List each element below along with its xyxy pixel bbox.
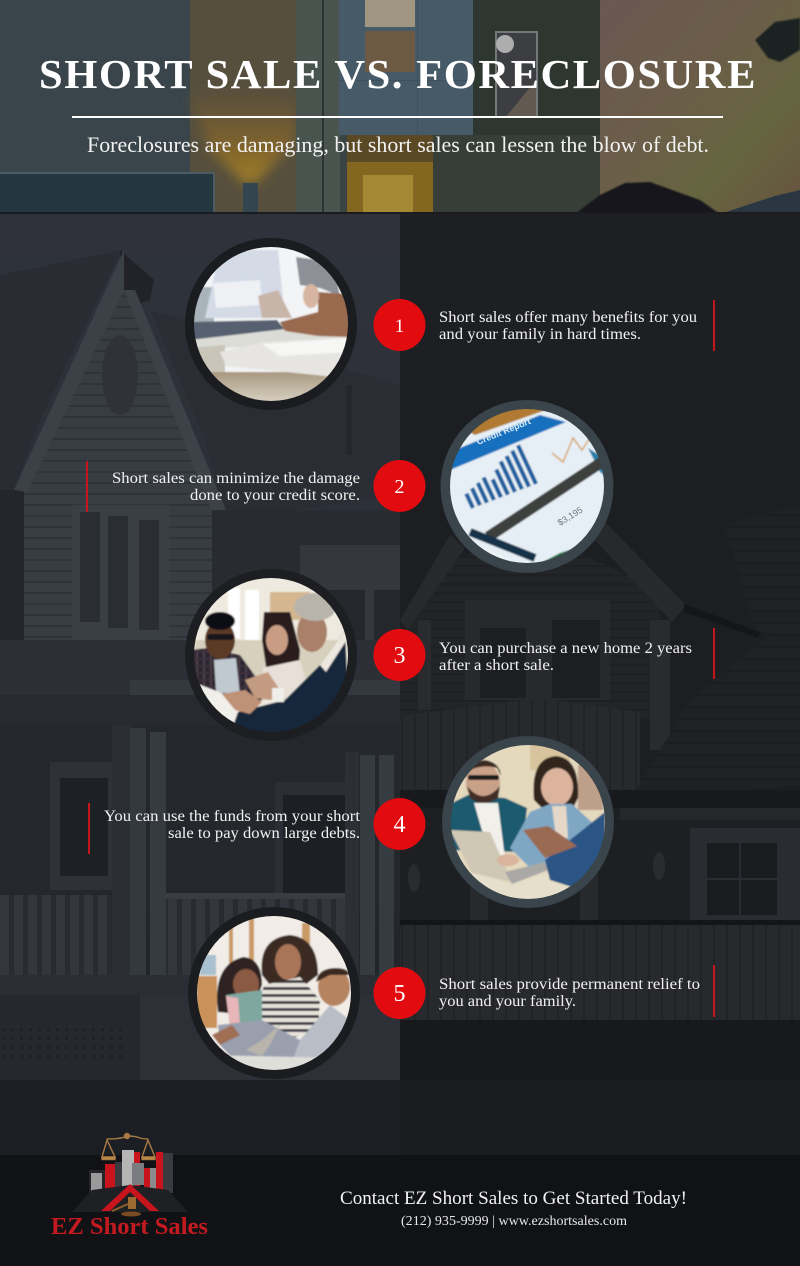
photo circle 2: credit report: $3,195 [556, 505, 584, 528]
number badge 4: 4 [394, 812, 406, 838]
footer contact details: (212) 935-9999 | www.ezshortsales.com [401, 1213, 628, 1228]
footer call to action: Contact EZ Short Sales to Get Started Today! [340, 1188, 687, 1209]
number badge 2: 2 [394, 476, 404, 498]
number badge 1: 1 [395, 316, 404, 337]
step 1 [185, 238, 715, 410]
logo: EZ Short Sales [51, 1134, 208, 1240]
photo circle 2: credit report: Credit Report [475, 416, 532, 447]
step 5 text: you and your family. [439, 993, 576, 1010]
step 1 text: and your family in hard times. [439, 326, 641, 343]
step 3 [185, 569, 715, 741]
logo scales of justice [102, 1134, 155, 1160]
photo circle 5: mother with two children [188, 907, 360, 1079]
logo wordmark: EZ Short Sales [51, 1214, 208, 1240]
number badge 4 [374, 798, 426, 850]
right background panel: dark house illustration [400, 523, 800, 1020]
logo city skyline [89, 1150, 173, 1195]
footer band [0, 1155, 800, 1266]
photo circle 4: smiling couple at laptop [442, 736, 614, 908]
number badge 1 [374, 299, 426, 351]
step 1 red bar [713, 300, 715, 351]
step 4 text: sale to pay down large debts. [168, 825, 360, 842]
step 5 text: Short sales provide permanent relief to [439, 976, 700, 993]
left background panel: house illustration [0, 214, 400, 1155]
subtitle: Foreclosures are damaging, but short sales can lessen the blow of debt. [87, 132, 709, 157]
logo house roofs and gavel [72, 1184, 188, 1216]
step 2 text: done to your credit score. [190, 487, 360, 504]
number badge 3 [374, 629, 426, 681]
step 5 red bar [713, 965, 715, 1017]
number badge 2 [374, 460, 426, 512]
photo circle 2: credit report [440, 400, 614, 573]
step 1 text: Short sales offer many benefits for you [439, 309, 697, 326]
header photo: modern house at dusk [0, 0, 800, 214]
step 3 text: after a short sale. [439, 657, 554, 674]
step 3 red bar [713, 628, 715, 679]
photo circle 3: couple with agent [185, 569, 357, 741]
step 4 text: You can use the funds from your short [104, 808, 361, 825]
step 3 text: You can purchase a new home 2 years [439, 640, 692, 657]
header band bottom shadow [0, 212, 800, 214]
title: SHORT SALE VS. FORECLOSURE [39, 51, 757, 97]
number badge 5 [374, 967, 426, 1019]
step 4 [88, 736, 614, 908]
step 2 [86, 400, 614, 573]
title rule [72, 116, 723, 118]
step 2 red bar [86, 461, 88, 512]
number badge 5: 5 [394, 981, 406, 1007]
number badge 3: 3 [394, 643, 406, 669]
step 2 text: Short sales can minimize the damage [112, 470, 360, 487]
step 5 [188, 907, 715, 1079]
step 4 red bar [88, 803, 90, 854]
photo circle 1: hands on laptop [185, 238, 357, 410]
